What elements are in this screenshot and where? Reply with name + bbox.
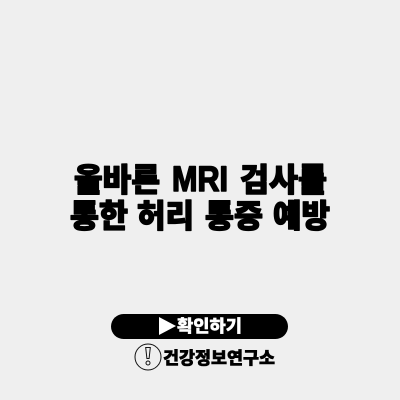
title: MRI <box>172 160 228 199</box>
title: 통한 <box>70 198 128 234</box>
title: 검사를 <box>240 162 327 198</box>
title: 통증 <box>205 198 263 234</box>
title <box>70 160 330 234</box>
button: confirm <box>111 314 288 339</box>
icon: exclamation circle <box>135 344 161 370</box>
title: 올바른 <box>74 162 160 198</box>
title: 예방 <box>273 198 330 234</box>
brand name: 건강정보연구소 <box>163 349 275 368</box>
brand: health information institute <box>135 344 275 370</box>
title: 허리 <box>137 198 194 234</box>
button: confirm: 확인하기 <box>177 316 242 336</box>
